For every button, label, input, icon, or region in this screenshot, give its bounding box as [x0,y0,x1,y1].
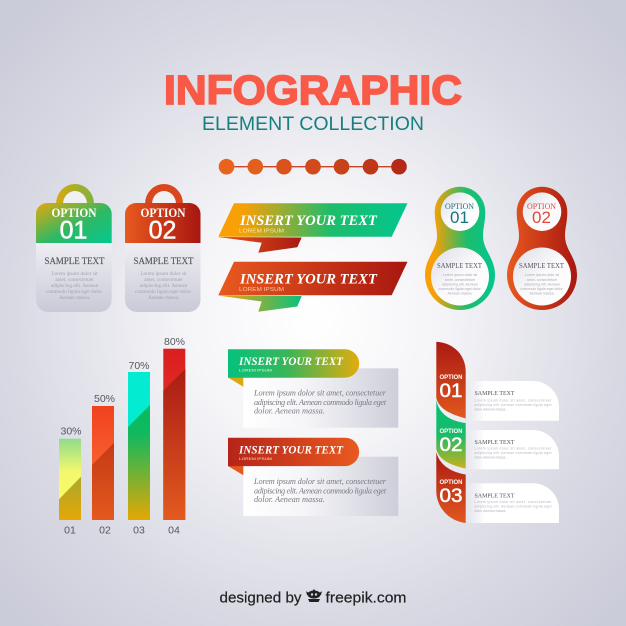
tag body text: Lorem ipsum dolor sit [51,271,98,277]
note box [243,457,398,516]
strip labels: OPTION [440,480,462,486]
strip labels: 02 [440,435,462,456]
bar 04 [163,349,185,520]
note subheading: LOREM IPSUM [239,456,272,461]
tag handle [145,184,183,204]
timeline dots [219,159,407,174]
bottom circle [431,248,489,306]
sample heading: SAMPLE TEXT [519,262,565,270]
tag body text [46,271,103,301]
tag body text: adipiscing elit. Aenean [140,283,188,289]
card text 03 [474,494,552,513]
body text: amet, consectetuer [445,278,476,282]
body text [521,273,563,296]
note body text: dolor. Aenean massa. [254,406,325,416]
ribbon heading: INSERT YOUR TEXT [239,213,378,229]
note subheading: LOREM IPSUM [239,368,272,372]
note header [228,438,359,466]
body text: commodo ligula eget dolor. [439,287,481,291]
body text: adipiscing elit. Aenean [524,282,560,286]
card text 02: adipiscing elit. Aenean commodo ligula eget [474,451,552,455]
card text 03: adipiscing elit. Aenean commodo ligula eget [474,504,552,508]
tag sample heading: SAMPLE TEXT [44,256,105,266]
body text: amet, consectetuer [527,278,558,282]
bar chart [59,336,185,536]
card text 03: Lorem ipsum dolor sit amet, consectetuer [474,500,552,504]
option label: OPTION [445,202,474,211]
card 03 [466,483,559,523]
percentage labels [60,336,185,438]
tag body text: Aenean massa. [59,295,90,301]
note body text: adipiscing elit. Aenean commodo ligula eget [254,398,387,407]
strip labels [440,375,462,507]
card text 02 [474,440,552,460]
body text: Aenean massa. [530,292,554,296]
category labels: 03 [133,524,145,536]
tag body text: Lorem ipsum dolor sit [140,271,187,277]
panel: pill option 02 [507,187,577,310]
ribbon tail [218,237,302,253]
percentage labels: 50% [94,393,115,405]
body text: Aenean massa. [448,292,472,296]
strip segment 02 [436,400,466,468]
tag body text: commodo ligula eget dolor. [46,289,103,295]
card text 02: dolor. Aenean massa. [474,456,506,460]
sample heading: SAMPLE TEXT [437,262,483,270]
body text: Lorem ipsum dolor sit [525,273,559,277]
strip segment 03 [436,452,466,523]
top circle [523,192,561,231]
panel: note card green [228,349,398,428]
option number: 02 [532,208,551,227]
pill shape [425,187,495,310]
tag option label: OPTION [140,206,186,220]
body text: adipiscing elit. Aenean [442,282,478,286]
option number: 01 [450,208,469,227]
card text 01: SAMPLE TEXT [474,391,515,397]
panel: option tag 02 [125,184,200,312]
note header [228,349,359,378]
panel: note card red [228,438,398,516]
card text 02: Lorem ipsum dolor sit amet, consectetuer [474,446,552,450]
title: INFOGRAPHIC [164,67,462,113]
ribbon body [218,262,408,295]
top circle [441,192,479,231]
tag number: 01 [60,216,87,244]
tag sample heading: SAMPLE TEXT [134,256,194,266]
ribbon subheading: LOREM IPSUM [239,287,284,293]
note heading: INSERT YOUR TEXT [238,356,344,368]
tag header [125,203,200,243]
panel: stacked options [436,342,559,523]
tag body text: amet, consectetuer [55,277,94,283]
note body text [253,477,387,504]
card text 01 [474,391,552,412]
tag body text [135,271,192,301]
bar 01 [59,439,81,520]
note body text: dolor. Aenean massa. [254,495,325,504]
percentage labels: 80% [164,336,185,348]
panel: pill option 01 [425,187,495,310]
card text 01: dolor. Aenean massa. [474,408,506,412]
tag option label: OPTION [52,206,96,220]
category labels: 02 [99,524,111,536]
tag body text: amet, consectetuer [144,277,183,283]
option label: OPTION [527,202,556,211]
card 02 [466,430,559,469]
strip labels: OPTION [440,429,462,435]
card text 01: Lorem ipsum dolor sit amet, consectetuer [474,398,552,402]
panel: ribbon banner green [218,203,408,253]
body text [439,273,481,296]
panel: option tag 01 [36,184,112,312]
tag header [36,203,112,243]
tag body [36,243,112,312]
tag body text: adipiscing elit. Aenean [51,283,99,289]
note fold [228,378,243,387]
note heading: INSERT YOUR TEXT [238,444,344,456]
percentage labels: 70% [128,360,150,372]
ribbon heading: INSERT YOUR TEXT [239,272,378,288]
attribution prefix: designed by [220,590,302,606]
strip labels: 03 [440,486,462,507]
tag body [125,243,200,312]
tag handle [56,184,94,204]
panel: ribbon banner red [218,262,408,312]
tag body text: Aenean massa. [148,295,179,301]
body text: commodo ligula eget dolor. [521,287,563,291]
strip segment 01 [436,342,466,418]
card text 02: SAMPLE TEXT [474,440,515,446]
icon: freepik logo [306,589,322,602]
percentage labels: 30% [60,426,82,438]
category labels: 01 [64,524,76,536]
card text 03: SAMPLE TEXT [474,494,515,500]
tag body text: commodo ligula eget dolor. [135,289,192,295]
note box [243,368,398,428]
strip labels: 01 [440,381,462,402]
strip labels: OPTION [440,375,462,381]
note fold [228,466,243,475]
category labels [64,524,180,536]
card text 03: dolor. Aenean massa. [474,509,506,513]
note body text [253,388,387,416]
card 01 [466,381,559,421]
note body text: adipiscing elit. Aenean commodo ligula eget [254,486,387,496]
ribbon body [218,203,408,237]
bar 02 [92,406,114,520]
bottom circle [513,248,571,306]
pill shape [507,187,577,310]
ribbon subheading: LOREM IPSUM [239,228,284,234]
attribution [220,589,406,606]
bar 03 [128,372,150,520]
subtitle: ELEMENT COLLECTION [202,114,424,135]
body text: Lorem ipsum dolor sit [443,273,477,277]
note body text: Lorem ipsum dolor sit amet, consectetuer [253,388,387,398]
category labels: 04 [168,524,180,536]
card text 01: adipiscing elit. Aenean commodo ligula eget [474,403,552,407]
attribution domain: freepik.com [326,590,406,606]
ribbon tail [218,296,302,312]
note body text: Lorem ipsum dolor sit amet, consectetuer [253,477,387,486]
tag number: 02 [149,216,176,244]
